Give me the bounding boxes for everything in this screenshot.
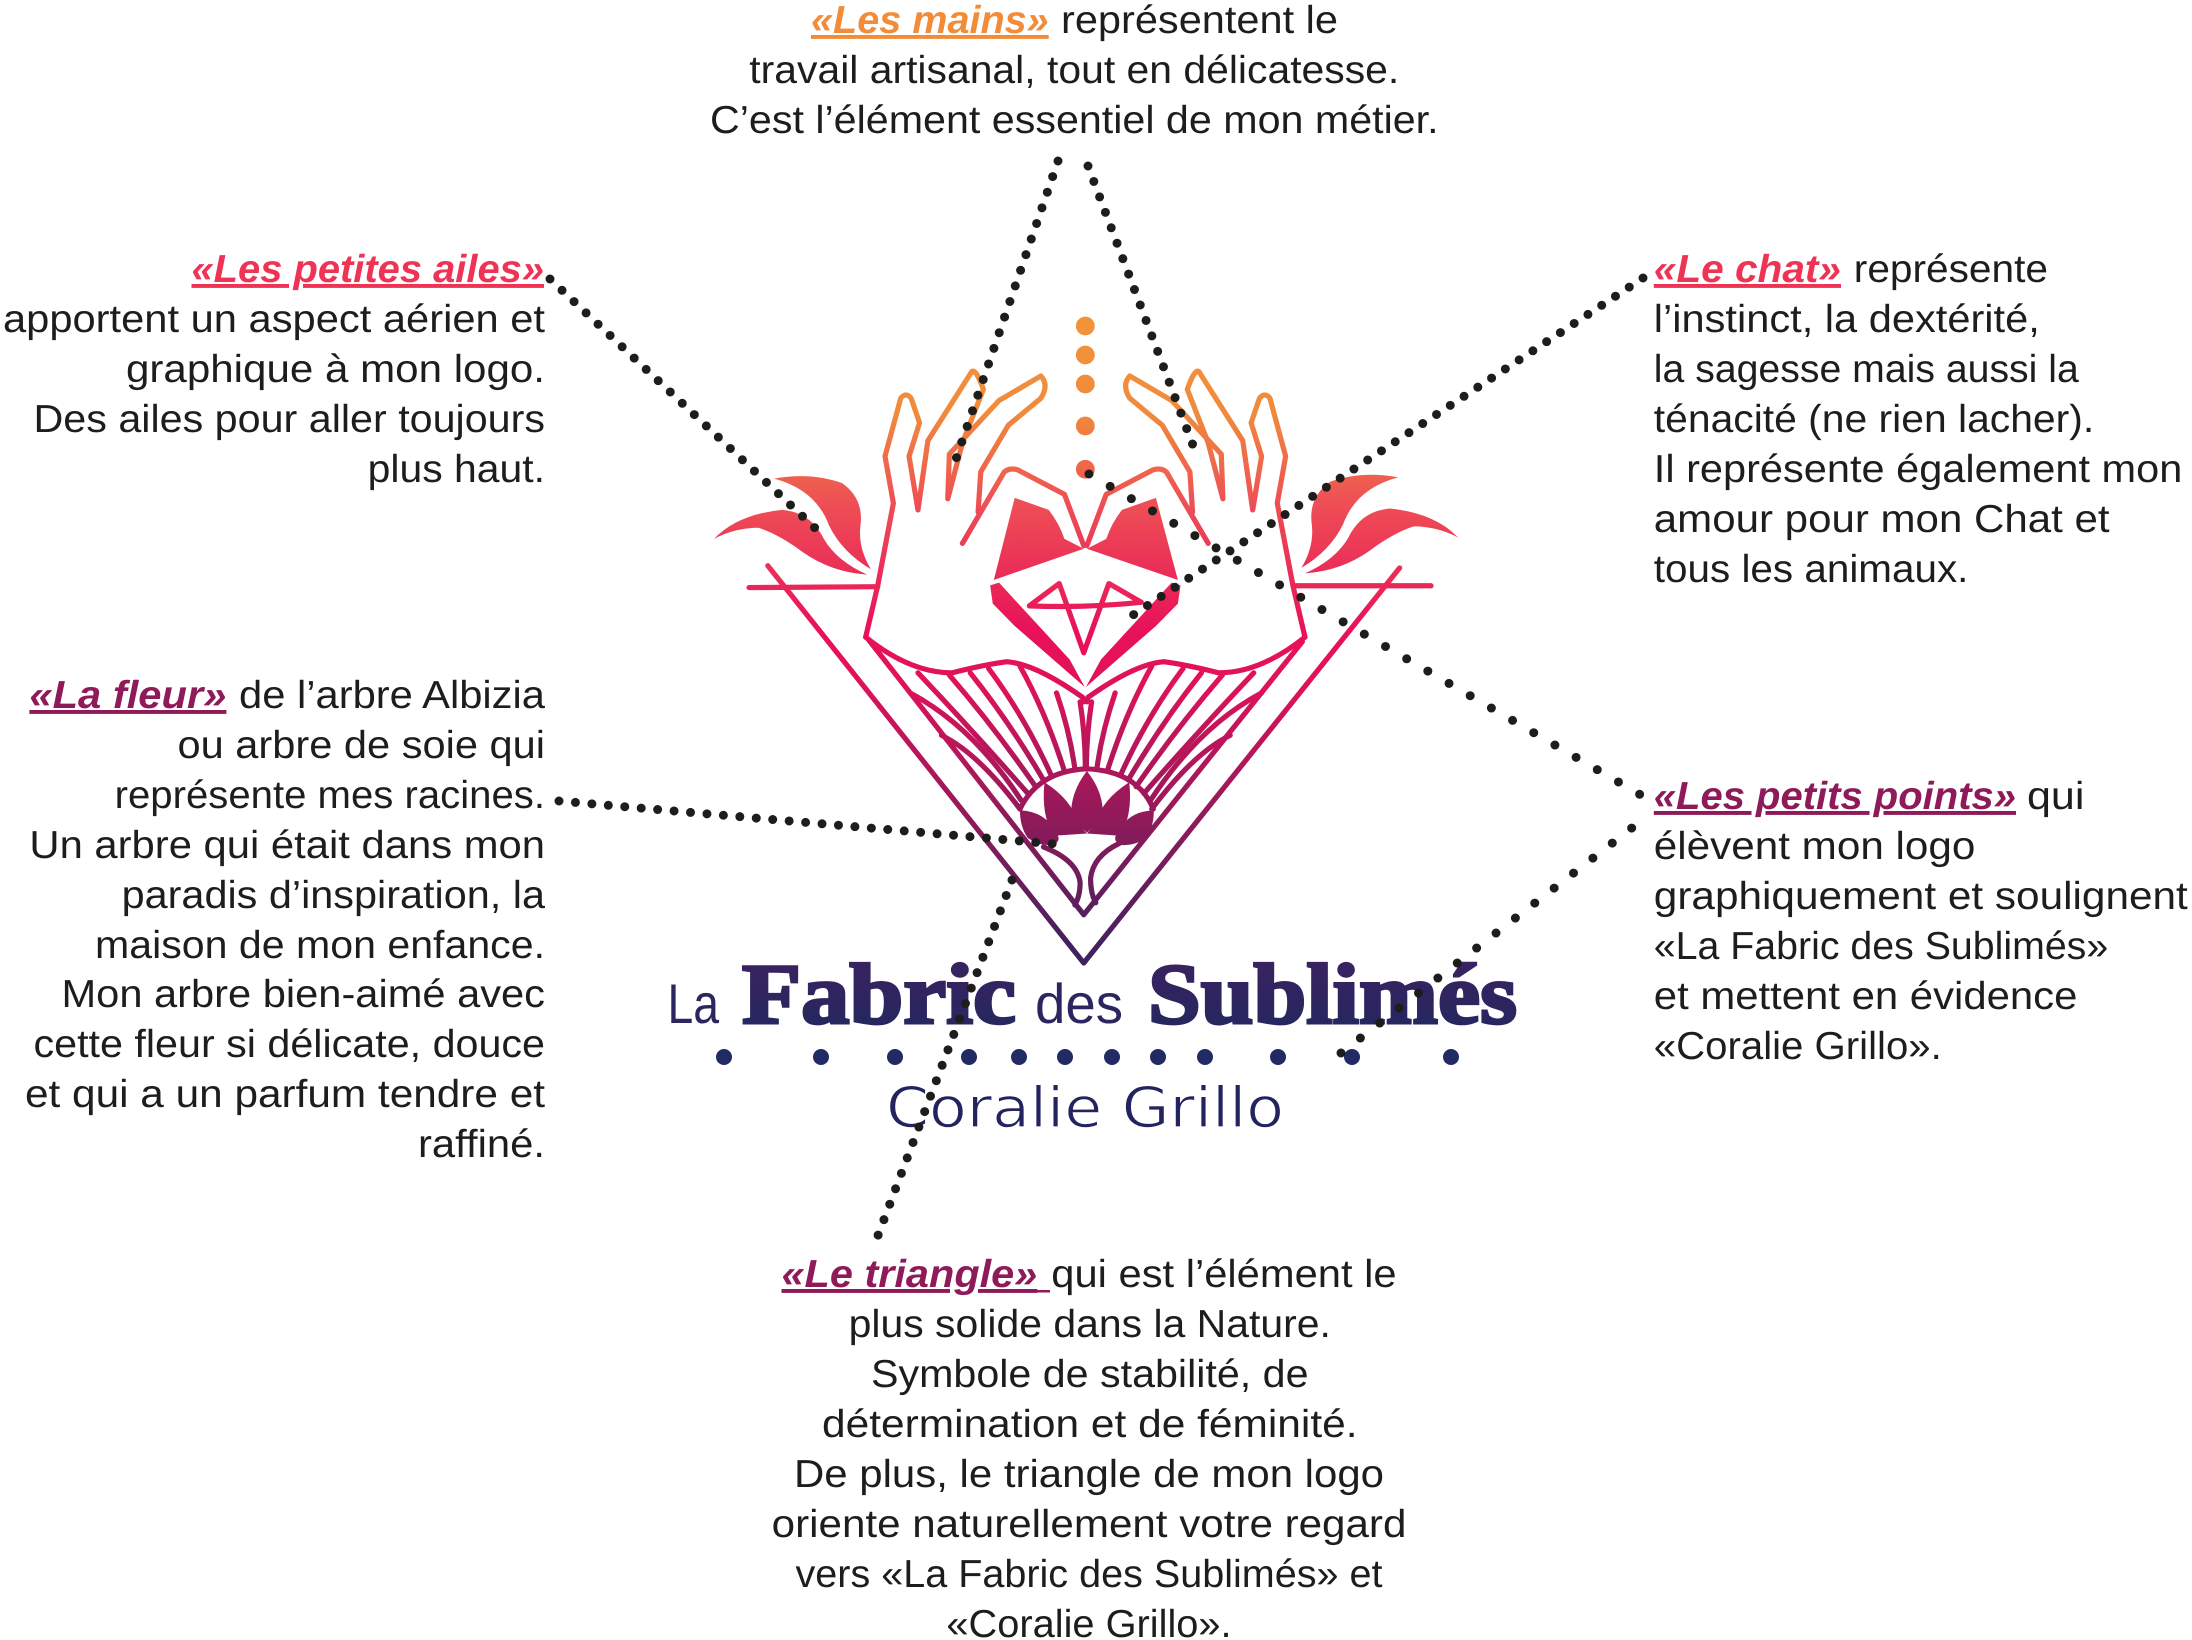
text block: le triangle: «Le triangle» (782, 1253, 1037, 1296)
text block: le triangle: plus solide dans la Nature. (849, 1303, 1331, 1346)
text block: les petites ailes (3, 248, 545, 491)
text block: le triangle: vers «La Fabric des Sublimés» et (796, 1553, 1383, 1596)
text block: la fleur: paradis d’inspiration, la (122, 874, 545, 917)
text block: le triangle: De plus, le triangle de mon logo (794, 1453, 1384, 1496)
text block: les mains: C’est l’élément essentiel de mon métier. (710, 99, 1439, 142)
text block: la fleur: représente mes racines. (115, 774, 545, 817)
icon: lotus flower (1020, 771, 1154, 845)
text block: les petits points: «Coralie Grillo». (1654, 1025, 1942, 1068)
text block: la fleur (25, 674, 545, 1166)
logo wordmark: Fabric (742, 946, 1016, 1042)
text block: les petites ailes: graphique à mon logo. (126, 348, 545, 391)
icon: cat face (990, 498, 1181, 687)
text block: le chat: amour pour mon Chat et (1654, 498, 2110, 541)
logo wordmark (668, 946, 1517, 1042)
text block: les petites ailes: plus haut. (368, 448, 545, 491)
text block: le chat: ténacité (ne rien lacher). (1654, 398, 2094, 441)
text block: les petits points: «Les petits points» (1654, 775, 2016, 818)
text block: les petits points: qui (2027, 775, 2084, 818)
text block: la fleur: Un arbre qui était dans mon (29, 824, 545, 867)
text block: les mains: «Les mains» (811, 0, 1049, 42)
text block: le triangle (772, 1253, 1406, 1640)
text block: les petites ailes: Des ailes pour aller toujours (34, 398, 545, 441)
text block: la fleur: «La fleur» (29, 674, 226, 717)
icon: inner triangle (868, 639, 1302, 915)
icon: right hand (1087, 371, 1305, 702)
text block: le chat: Il représente également mon (1654, 448, 2182, 491)
text block: le triangle: détermination et de féminité. (822, 1403, 1358, 1446)
text block: la fleur: ou arbre de soie qui (178, 724, 545, 767)
text block: le triangle: qui est l’élément le (1051, 1253, 1397, 1296)
text block: le chat: «Le chat» (1654, 248, 1841, 291)
text block: le chat: représente (1854, 248, 2048, 291)
text block: les petits points: graphiquement et soulignent (1654, 875, 2188, 918)
text block: les petits points: et mettent en évidence (1654, 975, 2077, 1018)
icon: flower stem (1043, 843, 1119, 905)
icon: left hand (866, 371, 1084, 702)
text block: le triangle: Symbole de stabilité, de (871, 1353, 1308, 1396)
logo emblem (714, 317, 1458, 963)
logo wordmark: La (668, 972, 720, 1035)
logo wordmark: des (1035, 972, 1123, 1035)
icon: five ascending dots (1076, 317, 1095, 479)
text block: le triangle: oriente naturellement votre regard (772, 1503, 1406, 1546)
text block: la fleur: de l’arbre Albizia (239, 674, 545, 717)
icon: flower rays (910, 666, 1262, 809)
logo dotted row (716, 1049, 1459, 1065)
text block: les petits points (1654, 775, 2188, 1068)
text block: la fleur: maison de mon enfance. (95, 924, 545, 967)
logo signature: Coralie Grillo (886, 1076, 1284, 1141)
text block: la fleur: et qui a un parfum tendre et (25, 1073, 545, 1116)
icon: right wings (1301, 475, 1458, 573)
dotted leader lines (550, 161, 1646, 1246)
text block: les mains: représentent le (1061, 0, 1338, 42)
text block: les petits points: élèvent mon logo (1654, 825, 1975, 868)
icon: horizon lines (749, 586, 1431, 588)
text block: le chat (1654, 248, 2182, 591)
text block: la fleur: Mon arbre bien-aimé avec (62, 973, 545, 1016)
text block: la fleur: raffiné. (418, 1123, 545, 1166)
logo wordmark: Sublimés (1148, 946, 1517, 1042)
text block: les petites ailes: apportent un aspect aérien et (3, 298, 545, 341)
text block: les petits points: «La Fabric des Sublimés» (1654, 925, 2108, 968)
text block: le chat: tous les animaux. (1654, 548, 1968, 591)
text block: le chat: la sagesse mais aussi la (1654, 348, 2079, 391)
icon: left wings (714, 476, 871, 575)
text block: les mains (710, 0, 1439, 142)
icon: outer triangle (768, 566, 1400, 963)
text block: la fleur: cette fleur si délicate, douce (34, 1023, 545, 1066)
text block: le chat: l’instinct, la dextérité, (1654, 298, 2040, 341)
text block: les petites ailes: «Les petites ailes» (192, 248, 544, 291)
text block: les mains: travail artisanal, tout en délicatesse. (749, 49, 1399, 92)
